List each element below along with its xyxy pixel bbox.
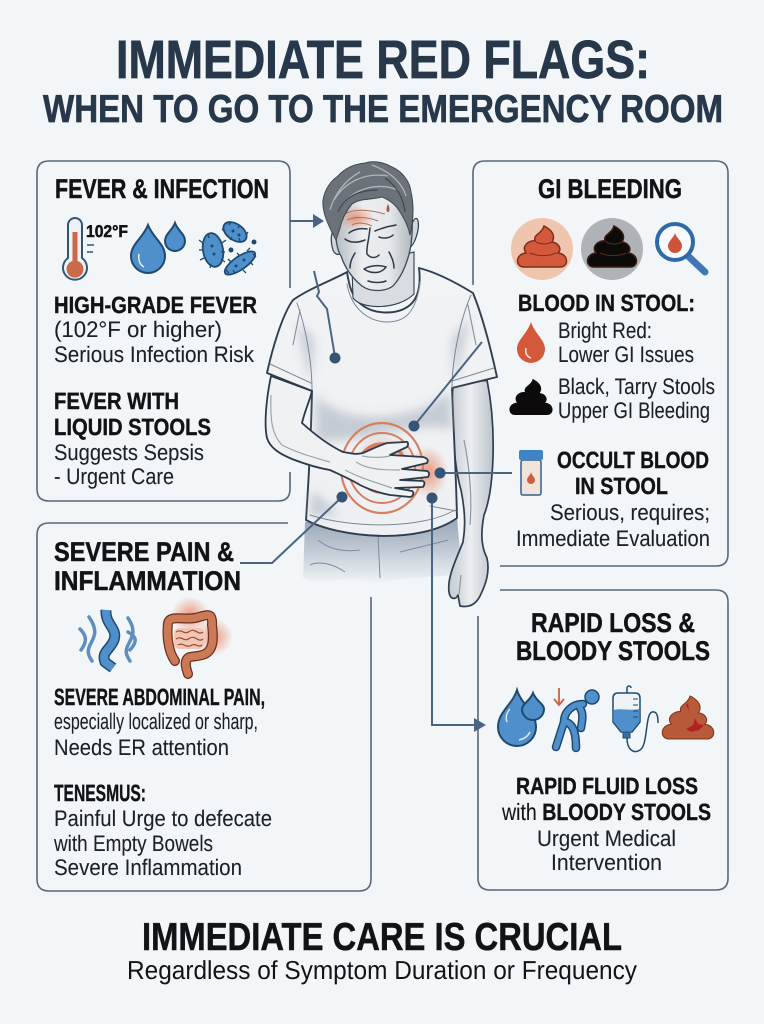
text: black tarry stools: Upper GI Bleeding bbox=[558, 398, 710, 423]
heading: rapid loss & bloody stools: RAPID LOSS & bbox=[531, 608, 695, 638]
icon: black stool bbox=[581, 218, 643, 280]
text: tenesmus: Painful Urge to defecate bbox=[54, 806, 272, 831]
heading: GI bleeding: GI BLEEDING bbox=[538, 174, 682, 204]
text: bright red bbox=[558, 318, 694, 367]
icon: inflamed intestines bbox=[168, 596, 233, 674]
text: high-grade fever: (102°F or higher) bbox=[54, 317, 222, 342]
icon: red drop bbox=[517, 322, 545, 363]
text: rapid fluid loss: Intervention bbox=[551, 850, 662, 875]
text: severe abdominal pain: SEVERE ABDOMINAL PAIN, bbox=[54, 684, 265, 710]
text: fever with liquid stools: FEVER WITH bbox=[54, 388, 179, 414]
connector: chest bbox=[314, 271, 340, 364]
icon: thermometer: 102°F bbox=[86, 222, 128, 241]
icon: fluid drops bbox=[498, 690, 544, 746]
text: severe abdominal pain: Needs ER attention bbox=[54, 735, 229, 760]
connector: GI bleeding bbox=[408, 342, 482, 432]
neck bbox=[352, 252, 414, 307]
title bbox=[43, 30, 723, 131]
shirt bbox=[267, 268, 497, 536]
text: occult blood: Serious, requires; bbox=[550, 500, 710, 525]
text: blood in stool: BLOOD IN STOOL: bbox=[518, 290, 695, 316]
shirt shading bbox=[297, 315, 470, 515]
fever flush bbox=[338, 204, 390, 230]
text: rapid fluid loss: with BLOODY STOOLS bbox=[501, 799, 711, 825]
connector: occult blood bbox=[434, 468, 512, 478]
face bbox=[335, 195, 412, 290]
text: high-grade fever bbox=[54, 292, 257, 367]
right arm and hand bbox=[449, 380, 493, 607]
icon: bright red stool bbox=[511, 218, 573, 280]
icon: bloody stool bbox=[662, 696, 714, 739]
heading: severe pain & inflammation: SEVERE PAIN & bbox=[54, 537, 234, 567]
text: severe abdominal pain: especially localized or sharp, bbox=[54, 709, 258, 734]
icon: weak person bbox=[554, 688, 599, 748]
text: fever with liquid stools: - Urgent Care bbox=[54, 464, 174, 489]
icon: pain waves bbox=[80, 610, 135, 668]
text: bright red: Bright Red: bbox=[558, 318, 652, 343]
text: tenesmus: TENESMUS: bbox=[54, 780, 146, 806]
panel: rapid loss & bloody stools bbox=[478, 590, 728, 890]
text: fever with liquid stools: Suggests Sepsis bbox=[54, 440, 204, 465]
text: occult blood: IN STOOL bbox=[575, 473, 668, 499]
facial features bbox=[345, 225, 396, 282]
heading: rapid loss & bloody stools: BLOODY STOOLS bbox=[516, 636, 710, 666]
text: fever with liquid stools bbox=[54, 388, 211, 489]
footer subtitle: Regardless of Symptom Duration or Frequency bbox=[127, 955, 637, 985]
text: rapid fluid loss bbox=[501, 773, 711, 875]
right ear bbox=[408, 218, 418, 248]
text: occult blood: OCCULT BLOOD bbox=[557, 447, 709, 473]
text: tenesmus: Severe Inflammation bbox=[54, 855, 242, 880]
text: tenesmus: with Empty Bowels bbox=[53, 831, 213, 856]
panel: GI bleeding bbox=[473, 161, 728, 566]
icon: IV drip bbox=[613, 686, 658, 752]
icon: bacteria bbox=[199, 218, 258, 279]
text: rapid fluid loss: Urgent Medical bbox=[537, 826, 676, 851]
text: bright red: Lower GI Issues bbox=[558, 342, 694, 367]
text: occult blood: Immediate Evaluation bbox=[516, 526, 710, 551]
title: IMMEDIATE RED FLAGS: bbox=[116, 30, 650, 90]
footer heading: IMMEDIATE CARE IS CRUCIAL bbox=[142, 916, 622, 959]
heading: rapid loss & bloody stools bbox=[516, 608, 710, 666]
panel: severe pain & inflammation bbox=[37, 523, 371, 891]
hair bbox=[323, 162, 413, 240]
icon: thermometer bbox=[63, 218, 128, 280]
text: black tarry stools: Black, Tarry Stools bbox=[558, 374, 715, 399]
pants bbox=[303, 518, 462, 585]
icon: black stool small bbox=[509, 379, 553, 415]
connector: severe pain bbox=[240, 492, 348, 563]
icon: sample bottle bbox=[519, 450, 543, 495]
heading: fever & infection: FEVER & INFECTION bbox=[55, 174, 269, 204]
arrow: fever to head bbox=[290, 214, 324, 228]
text: tenesmus bbox=[53, 780, 272, 880]
heading: severe pain & inflammation bbox=[54, 537, 241, 596]
text: high-grade fever: Serious Infection Risk bbox=[54, 342, 255, 367]
text: high-grade fever: HIGH-GRADE FEVER bbox=[54, 292, 257, 318]
left arm and hand bbox=[266, 376, 429, 497]
text: severe abdominal pain bbox=[54, 684, 265, 760]
shirt folds bbox=[270, 282, 494, 525]
text: rapid fluid loss: RAPID FLUID LOSS bbox=[516, 773, 698, 799]
connector: rapid loss bbox=[426, 492, 486, 732]
heading: severe pain & inflammation: INFLAMMATION bbox=[54, 566, 241, 596]
icon: water drops bbox=[131, 223, 185, 273]
left ear bbox=[331, 231, 340, 254]
abdominal pain rings bbox=[341, 423, 448, 513]
panel: fever & infection bbox=[37, 161, 290, 501]
text: occult blood bbox=[516, 447, 710, 551]
text: black tarry stools bbox=[558, 374, 715, 423]
icon: magnifying glass with blood bbox=[657, 224, 705, 272]
text: fever with liquid stools: LIQUID STOOLS bbox=[54, 414, 211, 440]
illustration: man in abdominal pain bbox=[266, 162, 497, 607]
